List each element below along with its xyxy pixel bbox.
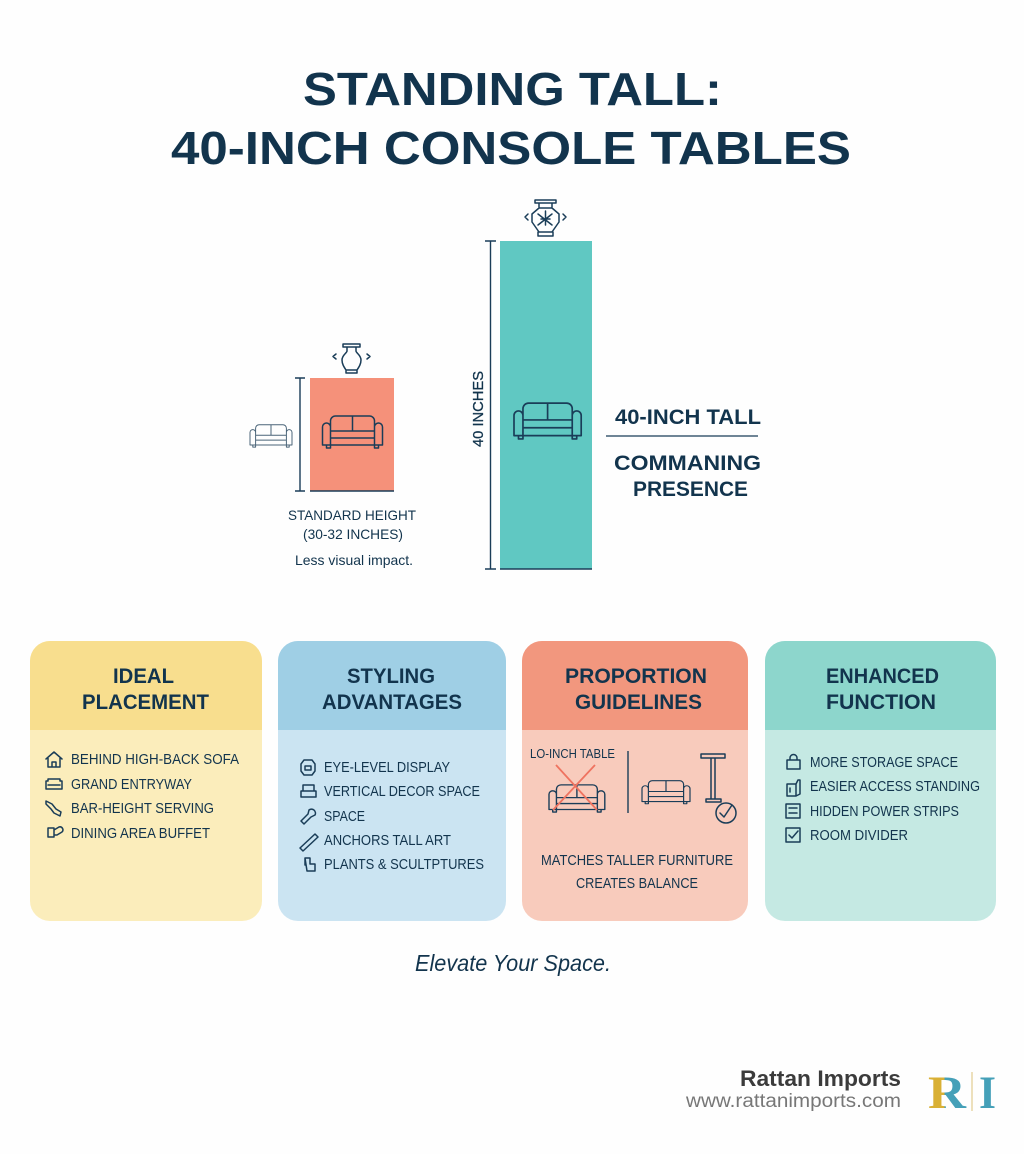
heading — [322, 665, 462, 714]
title: 40-INCH CONSOLE TABLES — [171, 122, 851, 174]
icon: sofa on standard table — [322, 416, 382, 448]
label: standard height: (30-32 INCHES) — [303, 526, 403, 542]
icon: matching sofa and tall table — [642, 754, 736, 823]
panel: proportion guidelines — [522, 641, 748, 921]
standard table bar — [310, 378, 394, 491]
list with icons: EYE-LEVEL DISPLAY — [324, 760, 450, 776]
heading: FUNCTION — [826, 691, 936, 714]
icon: side sofa — [250, 425, 292, 447]
callout: commanding presence: 40-INCH TALL — [615, 406, 761, 429]
list with icons: GRAND ENTRYWAY — [71, 777, 192, 793]
label: table: LO-INCH TABLE — [530, 747, 615, 761]
text: proportion notes: CREATES BALANCE — [576, 876, 698, 892]
heading: PROPORTION — [565, 665, 707, 688]
list with icons — [300, 760, 484, 873]
40-inch comparison — [470, 200, 761, 569]
icon: small vase — [333, 344, 370, 373]
list with icons — [786, 755, 980, 844]
title: STANDING TALL: — [303, 63, 722, 115]
list with icons: EASIER ACCESS STANDING — [810, 779, 980, 795]
list with icons: VERTICAL DECOR SPACE — [324, 784, 480, 800]
list with icons — [46, 752, 239, 842]
list with icons: BEHIND HIGH-BACK SOFA — [71, 752, 239, 768]
heading: PLACEMENT — [82, 691, 209, 714]
list with icons: SPACE — [324, 809, 365, 825]
heading: ADVANTAGES — [322, 691, 462, 714]
list with icons: ROOM DIVIDER — [810, 828, 908, 844]
label: standard height: STANDARD HEIGHT — [288, 507, 416, 523]
icon: sofa on tall table — [514, 403, 581, 439]
list with icons: BAR-HEIGHT SERVING — [71, 801, 214, 817]
callout: commanding presence: COMMANING — [614, 452, 761, 475]
standard height comparison — [250, 344, 416, 568]
text: proportion notes: MATCHES TALLER FURNITURE — [541, 853, 733, 869]
logo: I — [979, 1067, 996, 1119]
panel: ideal placement — [30, 641, 262, 921]
heading: IDEAL — [113, 665, 174, 688]
brand text — [685, 1066, 901, 1112]
label: standard height — [288, 507, 416, 568]
tagline: Elevate Your Space. — [415, 950, 611, 976]
panel: styling advantages — [278, 641, 506, 921]
list with icons: MORE STORAGE SPACE — [810, 755, 958, 771]
icon: tall vase — [525, 200, 566, 236]
tall table bar — [500, 241, 592, 569]
list with icons: PLANTS & SCULTPTURES — [324, 857, 484, 873]
heading: ENHANCED — [826, 665, 939, 688]
text: proportion notes — [541, 853, 733, 892]
heading: STYLING — [347, 665, 435, 688]
icon: crossed sofa — [549, 765, 605, 812]
heading — [565, 665, 707, 714]
callout: commanding presence: PRESENCE — [633, 478, 748, 501]
dimension: 40 inches — [485, 241, 496, 569]
list with icons: DINING AREA BUFFET — [71, 826, 210, 842]
heading: GUIDELINES — [575, 691, 702, 714]
dimension: standard height — [295, 378, 305, 491]
logo: R — [928, 1067, 967, 1119]
logo — [928, 1067, 996, 1119]
brand text: www.rattanimports.com — [685, 1091, 901, 1112]
heading — [82, 665, 209, 714]
label: standard height: Less visual impact. — [295, 552, 413, 568]
panel: enhanced function — [765, 641, 996, 921]
list with icons: HIDDEN POWER STRIPS — [810, 804, 959, 820]
heading — [826, 665, 939, 714]
label: 40 inches: 40 INCHES — [470, 371, 487, 447]
divider — [627, 751, 629, 813]
list with icons: ANCHORS TALL ART — [324, 833, 451, 849]
title — [171, 63, 851, 174]
brand text: Rattan Imports — [740, 1066, 901, 1091]
callout: commanding presence — [606, 406, 761, 501]
